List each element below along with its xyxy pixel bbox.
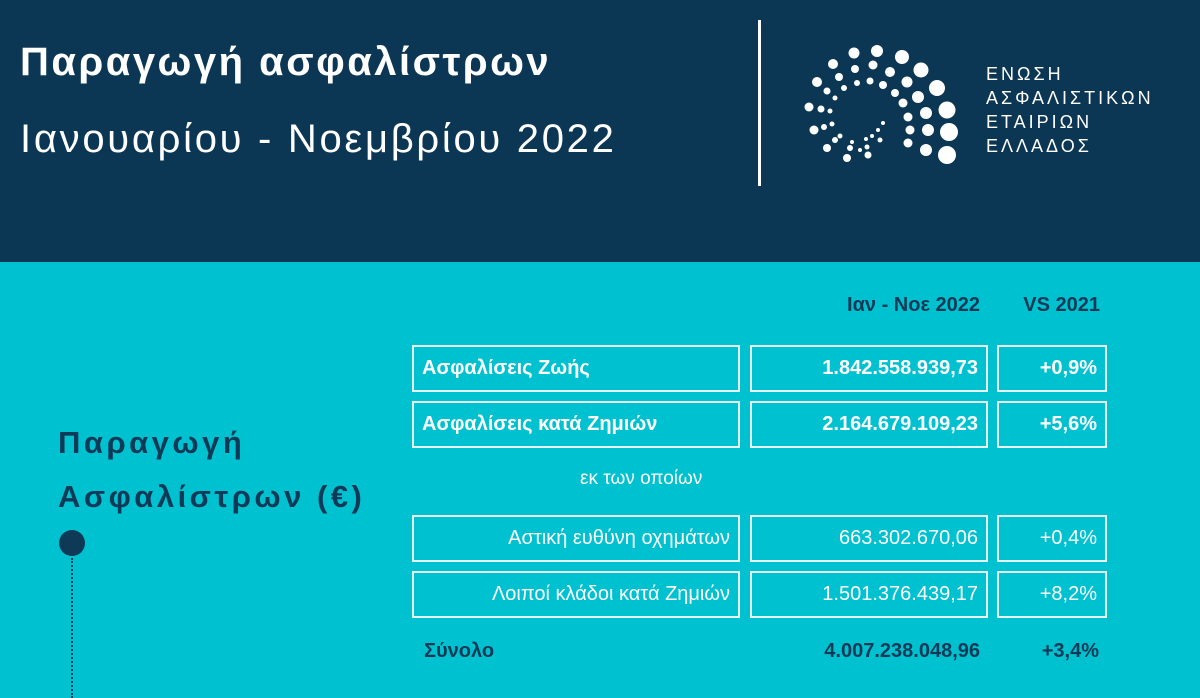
table: +5,6% bbox=[1040, 413, 1097, 435]
timeline marker bbox=[59, 530, 85, 698]
title: Παραγωγή ασφαλίστρων bbox=[20, 40, 551, 84]
row: life bbox=[412, 345, 740, 392]
section heading: Παραγωγή bbox=[58, 425, 245, 460]
row: other: Λοιποί κλάδοι κατά Ζημιών bbox=[492, 583, 730, 605]
logo text: ΕΤΑΙΡΙΩΝ bbox=[986, 112, 1092, 132]
row: motor liability: Αστική ευθύνη οχημάτων bbox=[508, 527, 730, 549]
table: 4.007.238.048,96 bbox=[824, 640, 980, 662]
row: non-life bbox=[412, 401, 740, 448]
icon: dotted spiral bbox=[804, 45, 958, 164]
table: +0,9% bbox=[1040, 357, 1097, 379]
logo text bbox=[986, 64, 1154, 156]
table: +3,4% bbox=[1042, 640, 1099, 662]
row: non-life: Ασφαλίσεις κατά Ζημιών bbox=[422, 413, 657, 435]
text: VS 2021 bbox=[1023, 294, 1100, 316]
row: life: Ασφαλίσεις Ζωής bbox=[422, 357, 590, 379]
of which: εκ των οποίων bbox=[580, 468, 702, 489]
table: 2.164.679.109,23 bbox=[822, 413, 978, 435]
table: 1.501.376.439,17 bbox=[822, 583, 978, 605]
table: +0,4% bbox=[1040, 527, 1097, 549]
logo text: ΑΣΦΑΛΙΣΤΙΚΩΝ bbox=[986, 88, 1154, 108]
total row: Σύνολο bbox=[424, 640, 494, 662]
logo text: ΕΝΩΣΗ bbox=[986, 64, 1064, 84]
header band bbox=[0, 0, 1200, 262]
row: motor liability bbox=[412, 515, 740, 562]
logo text: ΕΛΛΑΔΟΣ bbox=[986, 136, 1092, 156]
section heading: Ασφαλίστρων (€) bbox=[58, 479, 365, 514]
logo bbox=[804, 45, 1154, 164]
column headers: Ιαν - Νοε 2022 bbox=[847, 294, 980, 316]
subtitle: Ιανουαρίου - Νοεμβρίου 2022 bbox=[20, 117, 617, 161]
vertical divider bbox=[758, 20, 761, 186]
table: 663.302.670,06 bbox=[839, 527, 978, 549]
table: 1.842.558.939,73 bbox=[822, 357, 978, 379]
section heading bbox=[58, 425, 365, 514]
table: +8,2% bbox=[1040, 583, 1097, 605]
row: other bbox=[412, 571, 740, 618]
table bbox=[412, 345, 1107, 662]
